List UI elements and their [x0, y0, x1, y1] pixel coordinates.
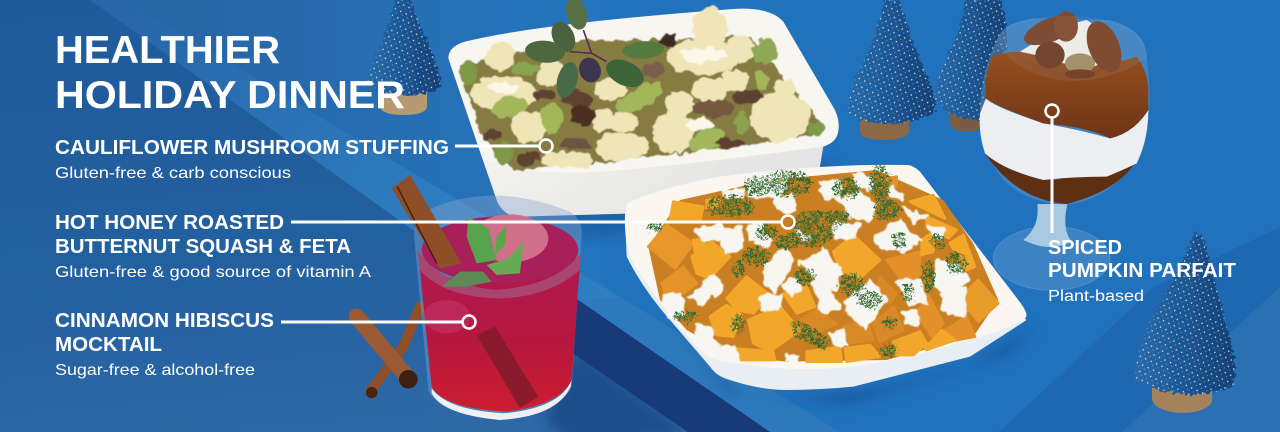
callout: spiced pumpkin parfait: [1046, 104, 1236, 305]
callout: spiced pumpkin parfait: PUMPKIN PARFAIT: [1048, 260, 1236, 282]
icon: bottle-brush tree behind title: [367, 0, 440, 115]
callout: hot honey roasted butternut squash and feta: HOT HONEY ROASTED: [55, 212, 284, 234]
food: [460, 7, 825, 170]
food: [648, 165, 998, 362]
hibiscus mocktail glass: [392, 175, 582, 420]
callout: cinnamon hibiscus mocktail: CINNAMON HIBISCUS: [55, 310, 274, 332]
mint garnish: [442, 217, 523, 287]
callout: cinnamon hibiscus mocktail: [55, 310, 476, 379]
callout: hot honey roasted butternut squash and feta: BUTTERNUT SQUASH & FETA: [55, 236, 351, 258]
icon: bottle-brush tree top centre: [848, 0, 935, 140]
callout: cinnamon hibiscus mocktail: Sugar-free & alcohol-free: [55, 362, 255, 379]
parfait cream layer: [980, 98, 1148, 180]
cinnamon stick in drink: [392, 175, 462, 268]
cauliflower mushroom stuffing dish: [448, 0, 839, 217]
heading: HEALTHIER: [55, 29, 280, 72]
callout: hot honey roasted butternut squash and feta: Gluten-free & good source of vitamin A: [55, 264, 371, 281]
callout: cauliflower mushroom stuffing: [55, 137, 552, 182]
glass rim: [997, 17, 1147, 80]
callout: spiced pumpkin parfait: SPICED: [1048, 237, 1122, 259]
icon: bottle-brush tree bottom right: [1135, 232, 1235, 413]
heading: [55, 29, 405, 117]
callout: spiced pumpkin parfait: Plant-based: [1048, 288, 1144, 305]
icon: bottle-brush tree behind parfait: [933, 0, 1007, 132]
parfait pumpkin layer: [985, 52, 1148, 138]
callout: cinnamon hibiscus mocktail: MOCKTAIL: [55, 334, 162, 356]
cinnamon sticks on table: [357, 307, 420, 398]
callout: cauliflower mushroom stuffing: CAULIFLOWER MUSHROOM STUFFING: [55, 137, 449, 159]
callout: cauliflower mushroom stuffing: Gluten-free & carb conscious: [55, 165, 291, 182]
bowl: [625, 217, 1027, 390]
bowl: [482, 147, 823, 217]
roasted butternut squash and feta dish: [625, 165, 1027, 390]
spiced pumpkin parfait glass: [980, 9, 1149, 290]
sage garnish: [524, 0, 665, 100]
heading: HOLIDAY DINNER: [55, 74, 405, 117]
bowl shadows on surface: [460, 144, 840, 266]
pecans and whipped cream: [1020, 9, 1128, 79]
parfait bottom layer: [985, 153, 1137, 204]
callout: hot honey roasted butternut squash and feta: [55, 212, 794, 281]
